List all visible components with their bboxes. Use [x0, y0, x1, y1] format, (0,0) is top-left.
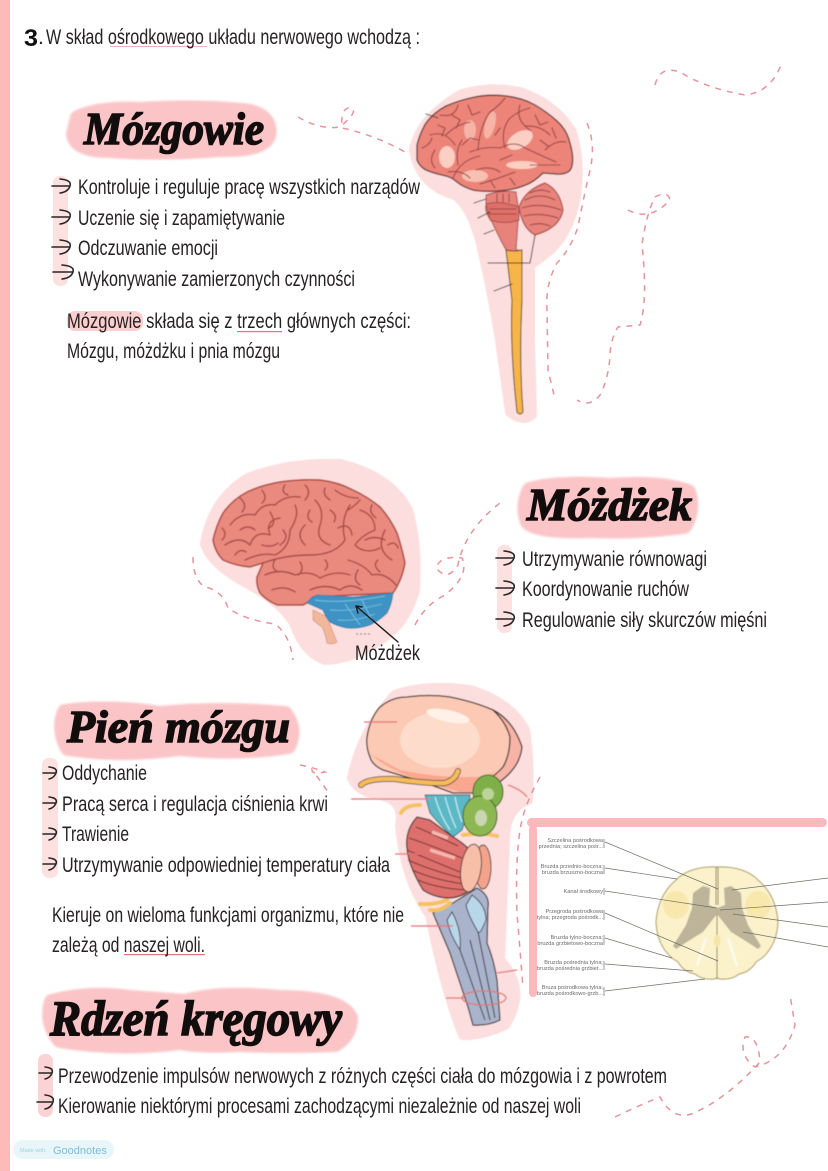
icon: brain with spinal cord	[414, 89, 578, 418]
dashed connectors around brainstem	[300, 765, 795, 1117]
dashed connectors around second brain	[193, 503, 500, 660]
text block: parts of the brain	[67, 310, 411, 363]
title: .	[38, 26, 44, 49]
diagram labels: Przegroda pośrodkowa	[545, 909, 604, 915]
cross-section diagram	[656, 867, 778, 979]
brain stem	[313, 610, 337, 644]
callout: Móżdżek label with arrow: Móżdżek	[355, 642, 420, 665]
title	[24, 25, 420, 52]
dashed connectors right of first brain	[547, 123, 670, 403]
bullet list: brainstem functions: Oddychanie	[62, 762, 147, 785]
panel: Mózgowie	[52, 103, 421, 363]
diagram labels	[537, 838, 604, 997]
bullet list: spinal cord functions	[37, 1054, 667, 1118]
bullet list: Móżdżek functions	[496, 545, 767, 633]
panel: spinal cord cross-section	[527, 818, 828, 997]
heading: Mózgowie: Mózgowie	[83, 103, 264, 154]
icon: brain with highlighted cerebellum	[205, 464, 416, 660]
bullet list: brainstem functions: Utrzymywanie odpowiedniej temperatury ciała	[62, 854, 390, 877]
title: W skład ośrodkowego układu nerwowego wchodzą :	[46, 26, 420, 49]
brain stem dots	[356, 633, 372, 635]
gyri	[422, 98, 566, 188]
label ticks	[426, 114, 535, 291]
highlights	[439, 146, 455, 168]
pons	[407, 817, 470, 898]
text block: involuntary functions	[52, 904, 404, 957]
decorative dashed path top right	[655, 62, 782, 95]
text block: parts of the brain: Mózgu, móżdżku i pnia mózgu	[67, 340, 280, 363]
diagram labels: bruzda brzuszno-boczna	[542, 870, 604, 876]
callout: Móżdżek label with arrow	[355, 606, 420, 665]
bullet list: Mózgowie functions: Odczuwanie emocji	[78, 237, 218, 260]
right thalamus lobe	[487, 710, 522, 783]
diagram labels: przednia; szczelina pośr...	[539, 844, 603, 850]
small nerves	[401, 805, 497, 910]
bullet list: Móżdżek functions: Utrzymywanie równowagi	[522, 548, 707, 571]
badge: Made with Goodnotes	[13, 1140, 114, 1159]
diagram labels: Kanał środkowy	[564, 889, 603, 895]
icon: brainstem	[351, 688, 529, 1035]
bullet list: Mózgowie functions: Kontroluje i reguluje pracę wszystkich narządów	[78, 176, 421, 199]
frame bars	[527, 818, 827, 827]
text block: involuntary functions: Kieruje on wieloma funkcjami organizmu, które nie	[52, 904, 404, 927]
peach lobes	[475, 845, 491, 889]
diagram labels: tylna; przegroda pośrodk...	[537, 915, 603, 921]
leader lines	[605, 842, 828, 991]
bullet list: Móżdżek functions: Koordynowanie ruchów	[522, 578, 690, 601]
heading: Pień mózgu: Pień mózgu	[66, 701, 290, 752]
panel: Pień mózgu	[42, 701, 404, 957]
title: 3	[24, 25, 38, 52]
cerebellum	[307, 593, 393, 628]
dashed connector near Mózgowie heading	[298, 108, 405, 152]
bullet list: Mózgowie functions	[52, 176, 421, 291]
cerebellum	[519, 183, 563, 235]
bullet list: Mózgowie functions: Wykonywanie zamierzonych czynności	[78, 268, 355, 291]
medulla	[433, 888, 500, 1025]
spinal cord	[506, 250, 523, 414]
gyri	[222, 485, 398, 592]
bullet list: brainstem functions: Pracą serca i regulacja ciśnienia krwi	[62, 793, 328, 816]
diagram labels: Bruza pośrodkowa tylna;	[542, 985, 603, 991]
label lines	[351, 722, 527, 998]
badge: Made with Goodnotes: Made with:	[20, 1148, 47, 1154]
bullet list: brainstem functions: Trawienie	[62, 823, 129, 846]
bullet list: brainstem functions	[42, 758, 390, 878]
cerebrum	[213, 480, 405, 605]
diagram labels: Bruzda pośrednia tylna;	[544, 960, 603, 966]
diagram labels: bruzda grzbietowo-boczna	[537, 941, 604, 947]
panel: Móżdżek	[496, 479, 767, 633]
cerebrum	[417, 95, 573, 191]
bullet list: spinal cord functions: Kierowanie niektórymi procesami zachodzącymi niezależnie od naszej woli	[58, 1095, 581, 1118]
teal midbrain	[425, 795, 470, 837]
brainstem	[486, 191, 519, 251]
yellow nerve band	[361, 771, 458, 785]
heading: Móżdżek: Móżdżek	[526, 479, 692, 530]
heading: Rdzeń kręgowy: Rdzeń kręgowy	[49, 990, 343, 1046]
bullet list: Mózgowie functions: Uczenie się i zapamiętywanie	[78, 207, 285, 230]
green bodies	[473, 775, 503, 809]
text block: parts of the brain: Mózgowie składa się z trzech głównych części:	[67, 310, 411, 333]
badge: Made with Goodnotes: Goodnotes	[53, 1145, 107, 1157]
thalamus	[367, 696, 510, 793]
diagram labels: Szczelina pośrodkowa	[547, 838, 604, 844]
diagram labels: Bruzda przednio-boczna;	[541, 864, 603, 870]
diagram labels: bruzda pośrednia grzbiet...	[537, 966, 603, 972]
diagram labels: Bruzda tylno-boczna;	[550, 935, 603, 941]
panel: Rdzeń kręgowy	[37, 990, 667, 1118]
diagram labels: bruzda pośrodkowo-grzb...	[537, 991, 603, 997]
left page margin bar	[0, 0, 10, 1171]
text block: involuntary functions: zależą od naszej woli.	[52, 934, 205, 957]
